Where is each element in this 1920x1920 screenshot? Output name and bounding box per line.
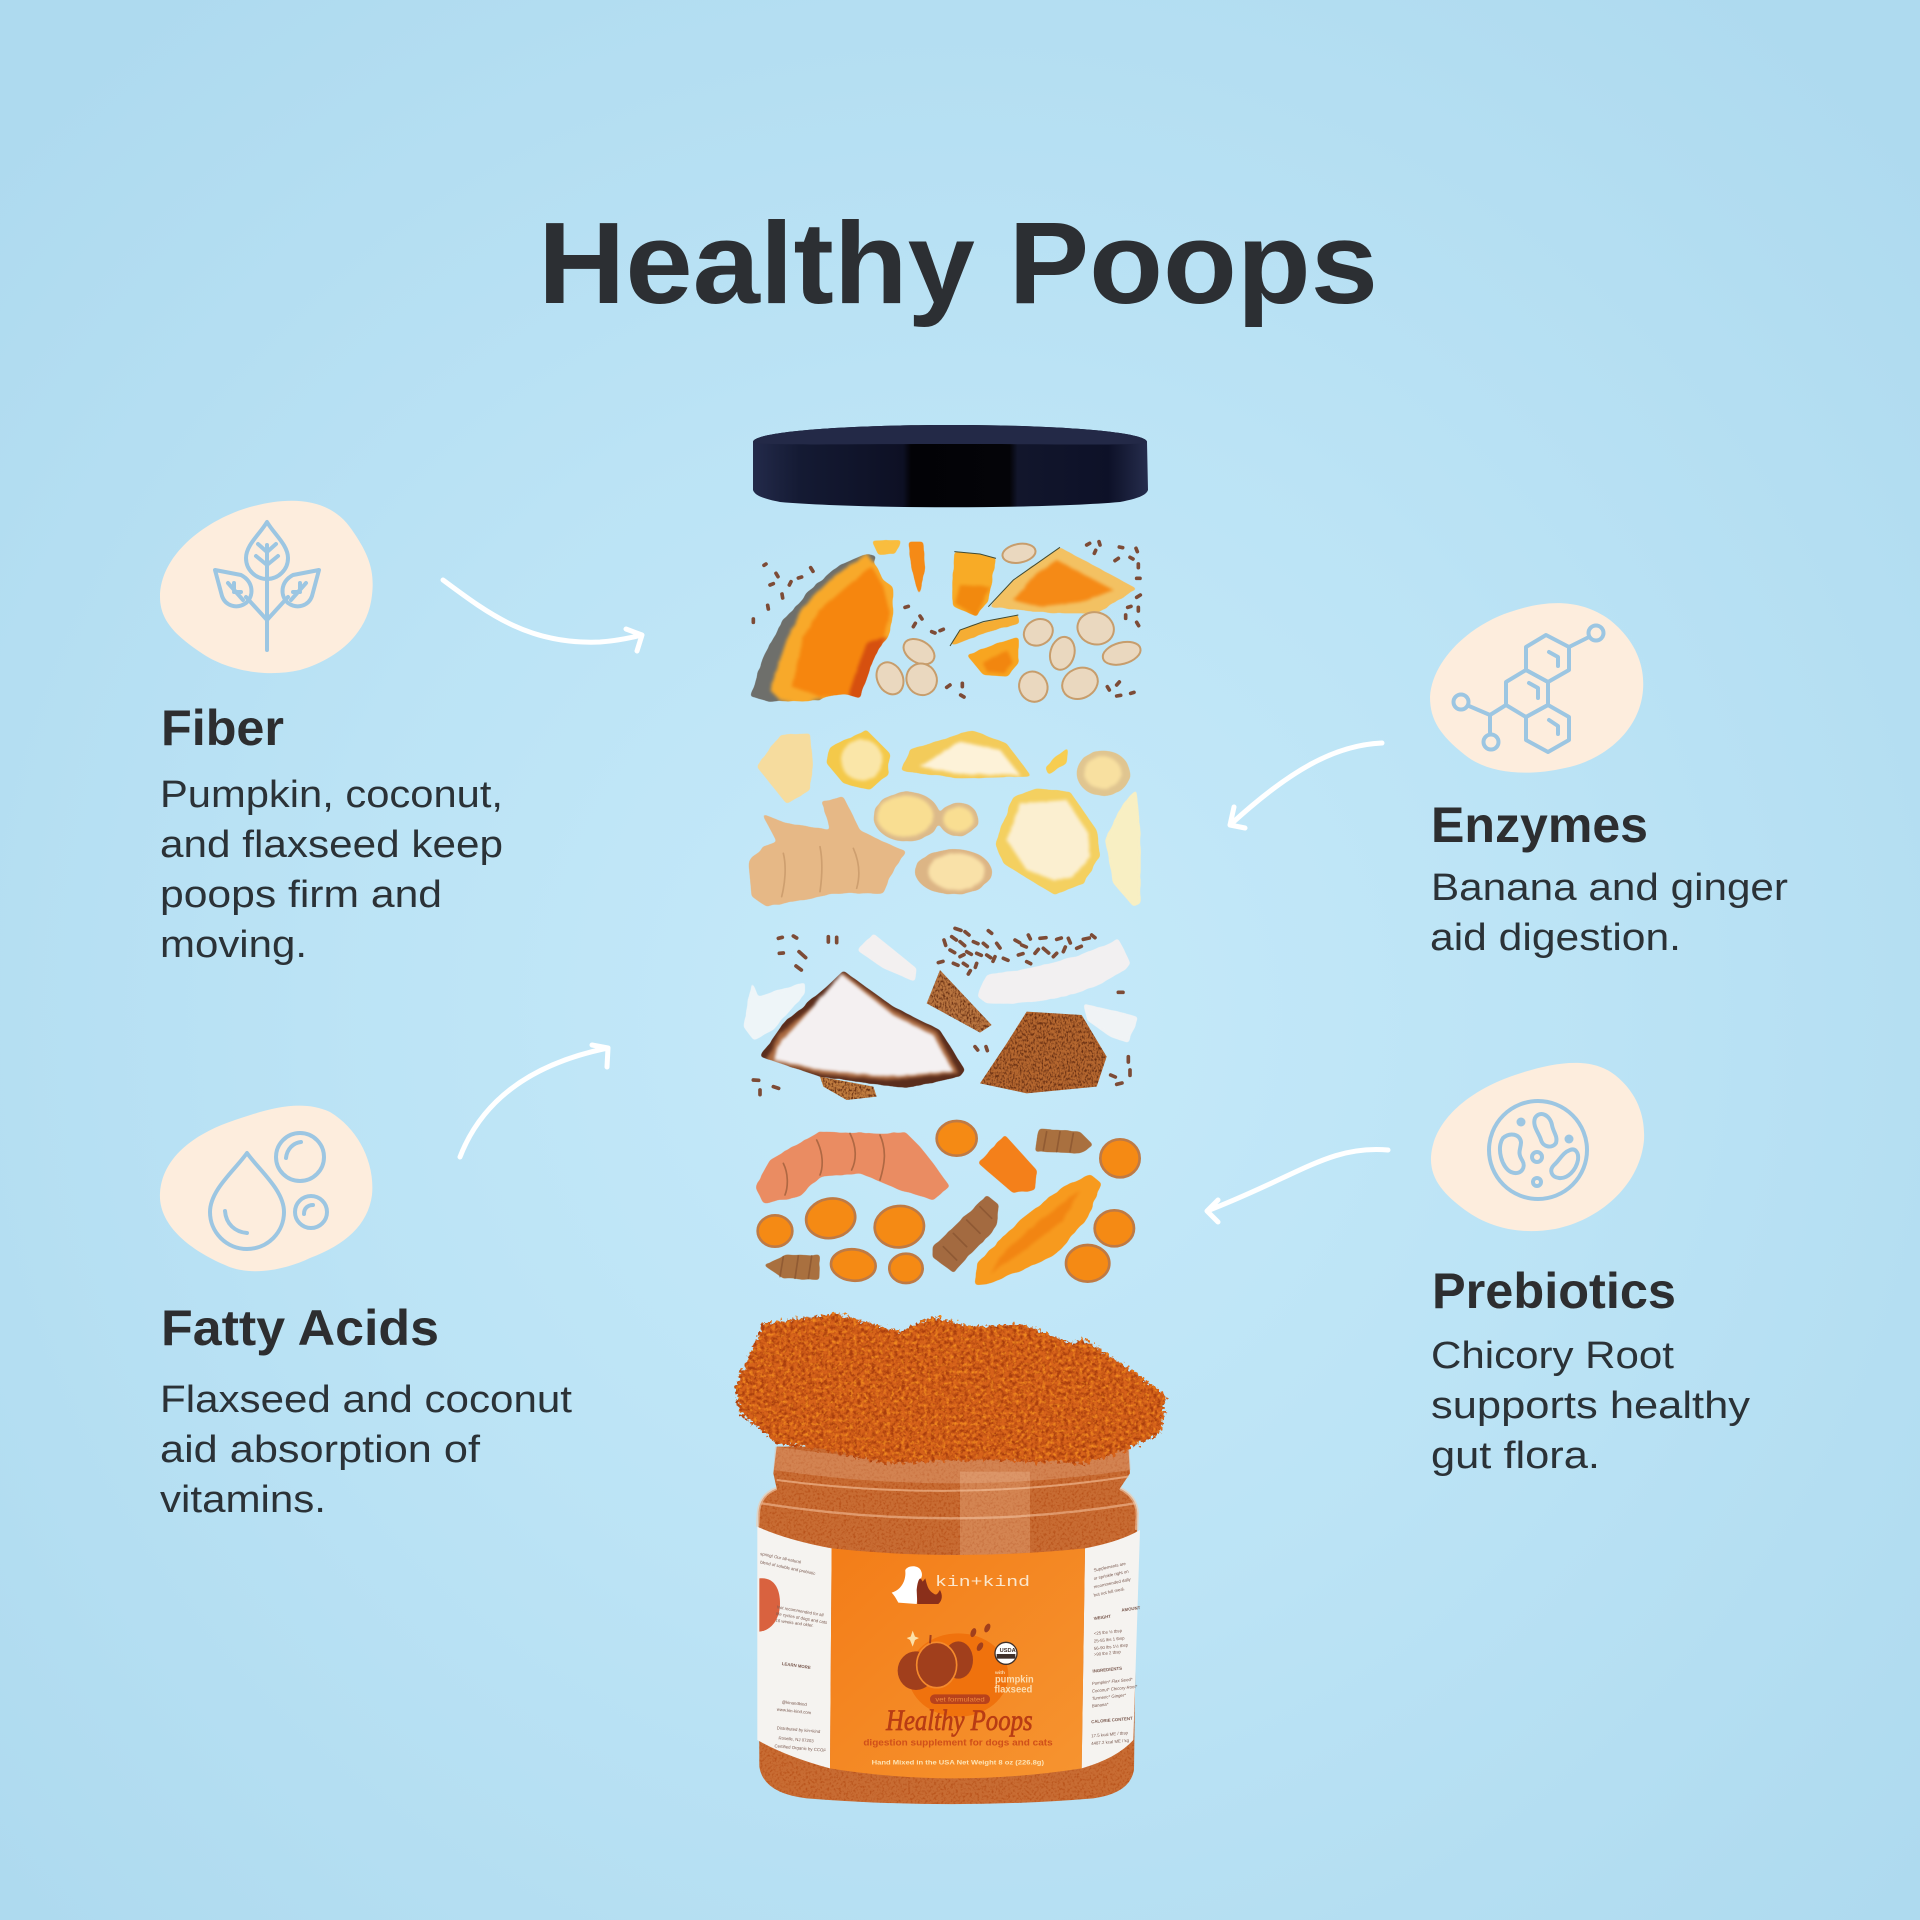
text: fatty acids description: Flaxseed and coconut xyxy=(160,1379,572,1421)
left side panel text: spring! Our all-natural xyxy=(760,1551,802,1565)
text: fatty acids description: vitamins. xyxy=(160,1479,326,1521)
heading: fatty acids: Fatty Acids xyxy=(161,1300,439,1356)
left side panel text: www.kin-kind.com xyxy=(777,1707,812,1715)
coconut and flaxseed row xyxy=(743,928,1138,1100)
right side panel text: Supplements are xyxy=(1093,1561,1127,1573)
jar label: digestion supplement for dogs and cats xyxy=(863,1737,1053,1747)
open jar with powder xyxy=(735,1313,1167,1804)
jar label: flaxseed xyxy=(994,1685,1032,1696)
text: enzymes description xyxy=(1430,867,1788,959)
right side panel text: Turmeric* Ginger* xyxy=(1092,1692,1127,1701)
jar label xyxy=(757,1527,1141,1778)
right side panel text: but not full meal. xyxy=(1093,1586,1125,1598)
left side panel text: Roselle, NJ 07203 xyxy=(778,1735,815,1743)
arrow: fatty acids to coconut row xyxy=(460,1045,608,1157)
arrow: prebiotics to turmeric row xyxy=(1207,1149,1388,1222)
left side panel text: @kinandkind xyxy=(782,1699,808,1707)
heading: fiber: Fiber xyxy=(161,700,284,756)
jar label: Hand Mixed in the USA Net Weight 8 oz (226.8g) xyxy=(872,1759,1044,1766)
heading: enzymes: Enzymes xyxy=(1431,797,1648,853)
left side panel text: Not recommended for all xyxy=(776,1604,824,1618)
logo: dog and cat xyxy=(892,1566,942,1604)
left side panel text: blend of soluble and prebiotic xyxy=(760,1559,817,1576)
seal: USDA organic xyxy=(995,1642,1017,1664)
heading: prebiotics: Prebiotics xyxy=(1432,1263,1676,1319)
arrow: enzymes to ginger row xyxy=(1230,743,1382,828)
panel: fatty acids xyxy=(160,1106,572,1521)
right side panel text: Pumpkin* Flax Seed* xyxy=(1092,1677,1133,1686)
jar label: Healthy Poops xyxy=(885,1705,1033,1737)
text: fiber description: poops firm and xyxy=(160,874,442,916)
jar label: vet formulated xyxy=(935,1697,985,1704)
icon: fiber plant xyxy=(160,501,373,673)
powder pile xyxy=(735,1313,1167,1463)
text: prebiotics description xyxy=(1431,1335,1750,1477)
right side panel text: >90 lbs 2 tbsp xyxy=(1094,1649,1122,1657)
jar lid xyxy=(753,425,1148,507)
text: fatty acids description: aid absorption of xyxy=(160,1429,480,1471)
text: enzymes description: Banana and ginger xyxy=(1431,867,1788,909)
icon: pumpkin xyxy=(898,1623,992,1690)
right side panel text: INGREDIENTS xyxy=(1092,1666,1122,1674)
right side panel text: 56-90 lbs 1½ tbsp xyxy=(1094,1642,1129,1651)
panel: fiber xyxy=(160,501,503,966)
panel: enzymes xyxy=(1430,603,1788,959)
pumpkin and flaxseed row xyxy=(750,540,1143,706)
title: Healthy Poops xyxy=(538,198,1378,328)
right side panel text: 25-55 lbs 1 tbsp xyxy=(1094,1635,1125,1644)
text: enzymes description: aid digestion. xyxy=(1430,917,1681,959)
jar label: kin+kind xyxy=(935,1575,1030,1591)
right side panel text: 17.5 kcal ME / tbsp xyxy=(1091,1730,1129,1738)
panel: prebiotics xyxy=(1431,1063,1750,1477)
right side panel text xyxy=(1091,1561,1141,1746)
text: fiber description: moving. xyxy=(160,924,307,966)
text: fatty acids description xyxy=(160,1379,572,1521)
icon: gut bacteria xyxy=(1431,1063,1644,1231)
left side panel text: Certified Organic by CCOF xyxy=(774,1743,827,1753)
right side panel text: or sprinkle right on xyxy=(1093,1569,1130,1581)
jar label: pumpkin xyxy=(995,1675,1034,1686)
text: fiber description: Pumpkin, coconut, xyxy=(160,774,503,816)
left side panel text: life cycles of dogs and cats xyxy=(776,1611,828,1625)
right side panel text: 4487.2 kcal ME / kg xyxy=(1091,1738,1130,1746)
text: fiber description: and flaxseed keep xyxy=(160,824,503,866)
right side panel text: Coconut* Chicory Root* xyxy=(1092,1684,1138,1694)
right side panel text: recommended daily xyxy=(1093,1576,1132,1589)
text: prebiotics description: supports healthy xyxy=(1431,1385,1750,1427)
turmeric row xyxy=(755,1121,1140,1285)
left side panel text: 16 weeks and older. xyxy=(775,1618,814,1628)
icon: oil drop and bubbles xyxy=(160,1106,372,1271)
arrow: fiber to pumpkin row xyxy=(443,580,642,651)
right side panel text: CALORIE CONTENT xyxy=(1091,1716,1133,1724)
jar label: with xyxy=(994,1670,1005,1676)
icon: enzyme molecule xyxy=(1430,603,1643,773)
left side panel text: Distributed by kin+kind xyxy=(777,1725,821,1734)
right side panel text: AMOUNT xyxy=(1121,1605,1141,1613)
right side panel text: <25 lbs ½ tbsp xyxy=(1094,1628,1123,1636)
left side panel text xyxy=(759,1551,828,1753)
seal: USDA organic: USDA xyxy=(1000,1648,1016,1654)
ginger and banana row xyxy=(748,730,1141,907)
text: prebiotics description: Chicory Root xyxy=(1431,1335,1674,1377)
jar body xyxy=(758,1447,1137,1804)
text: prebiotics description: gut flora. xyxy=(1431,1435,1600,1477)
text: fiber description xyxy=(160,774,503,966)
right side panel text: WEIGHT xyxy=(1093,1614,1112,1621)
right side panel text: Banana* xyxy=(1092,1702,1109,1708)
left side panel text: LEARN MORE xyxy=(782,1661,811,1670)
